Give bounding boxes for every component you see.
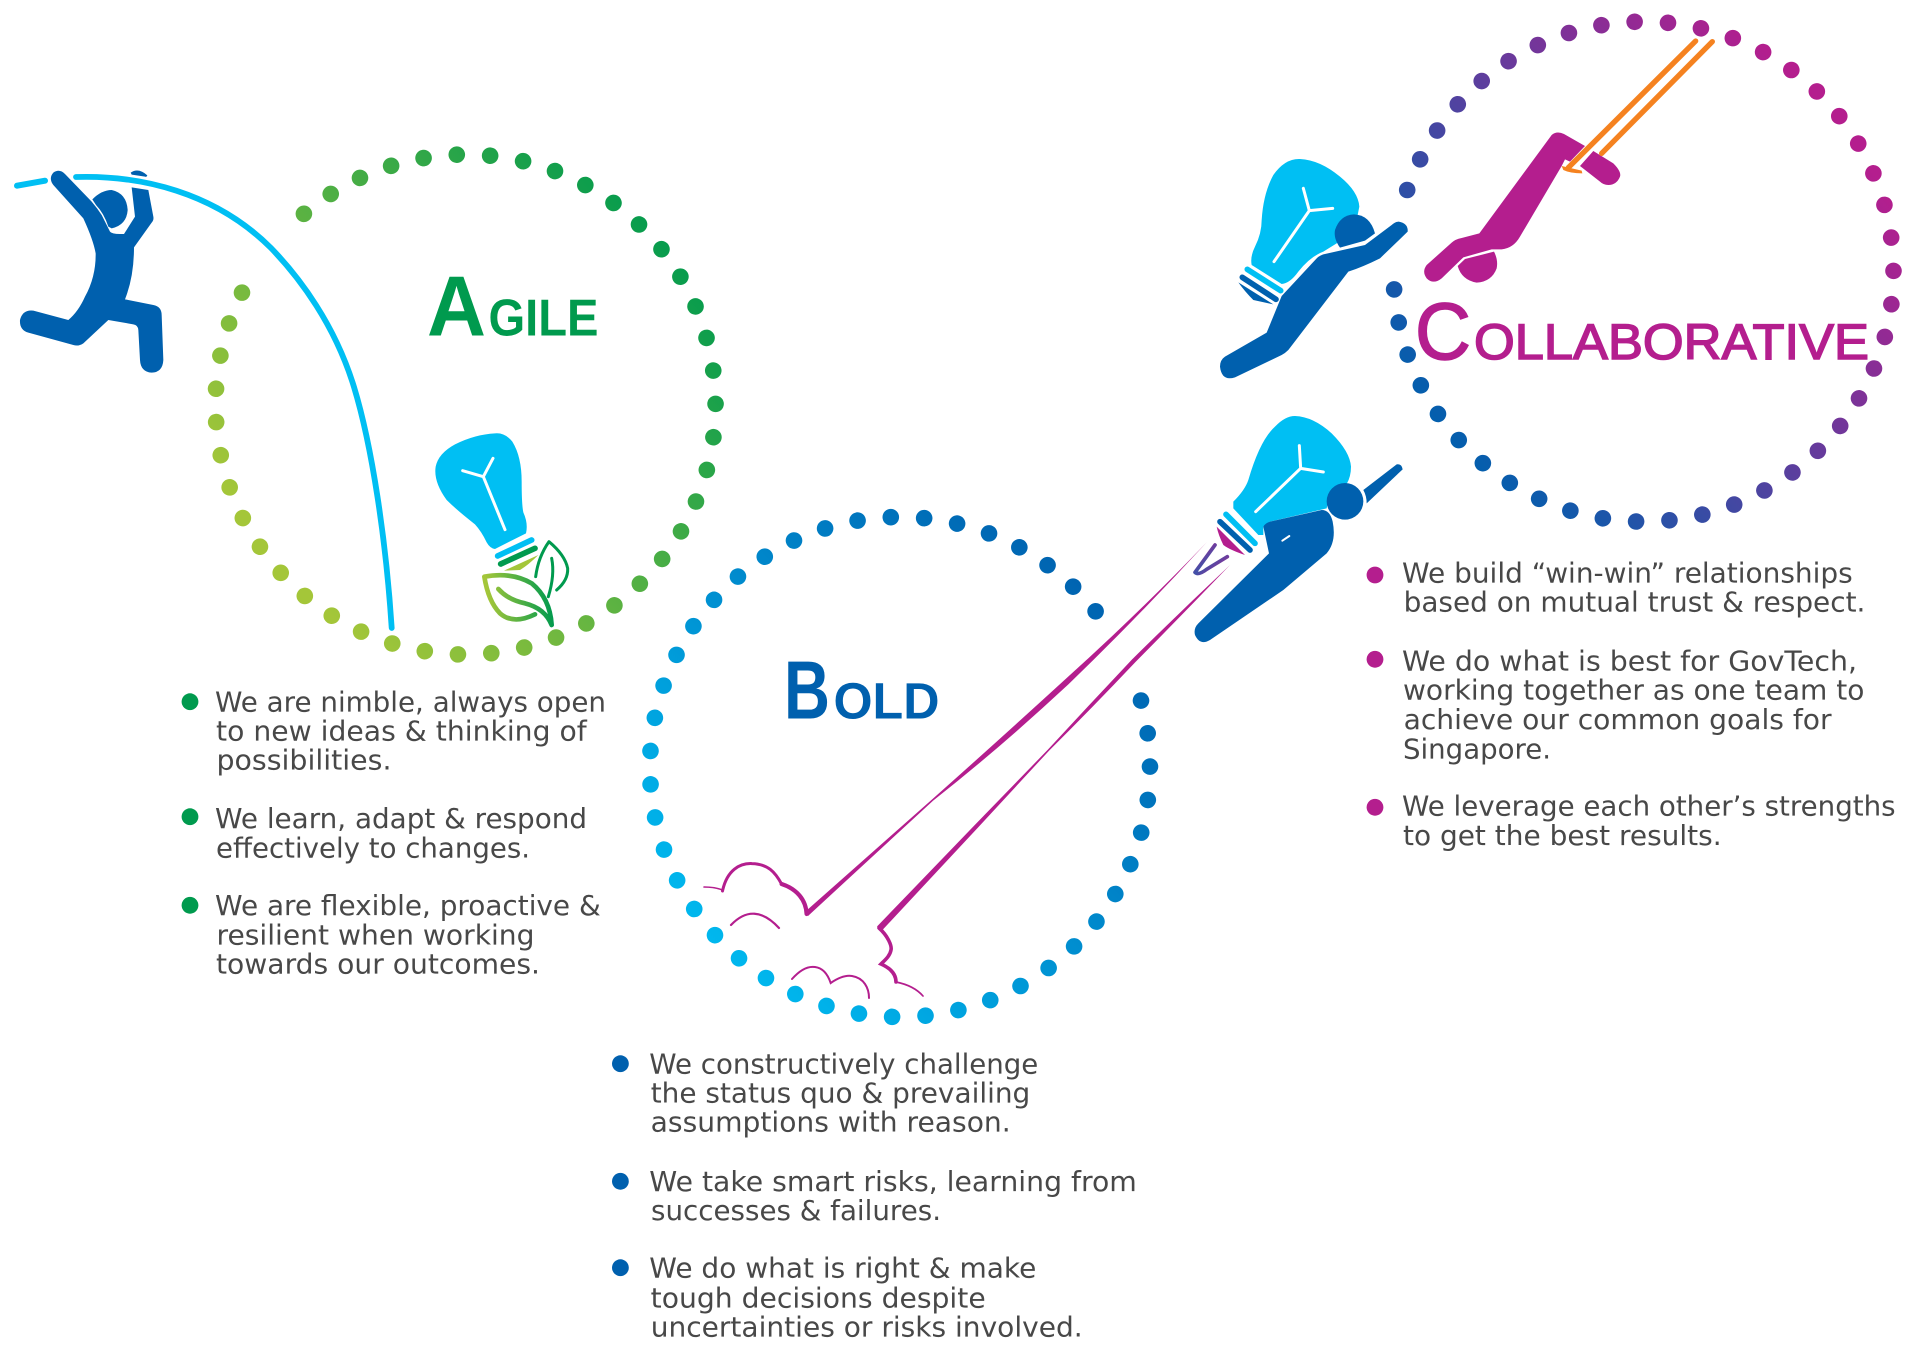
heading: collaborative — [1415, 287, 1869, 377]
bullet: agile 2: effectively to changes. — [216, 832, 530, 864]
bullet: agile 3: resilient when working — [216, 918, 534, 951]
panel: agile — [17, 155, 716, 980]
heading: bold: B — [784, 644, 830, 737]
bullet: bold 1: the status quo & prevailing — [651, 1076, 1030, 1109]
heading: agile: GILE — [488, 289, 598, 347]
bullet: collaborative 3: We leverage each other’s strengths — [1402, 790, 1896, 823]
bullet: agile 2 — [182, 802, 587, 864]
bullet: agile 3: towards our outcomes. — [216, 947, 540, 980]
bullet: agile 2: We learn, adapt & respond — [215, 802, 587, 835]
bullet: collaborative 2 — [1367, 645, 1864, 765]
bullet: bold 3: tough decisions despite — [651, 1281, 986, 1314]
bullet: collaborative 2: working together as one team to — [1403, 674, 1864, 707]
panel: collaborative — [1220, 22, 1896, 852]
bullet: bold 1 — [612, 1047, 1038, 1139]
bullet: collaborative 2: achieve our common goals for — [1404, 703, 1832, 736]
bullet: bold 1: assumptions with reason. — [651, 1106, 1011, 1139]
bullet: agile 1: to new ideas & thinking of — [216, 715, 588, 748]
dotted circle: agile — [216, 155, 716, 655]
bullet: bold 3 — [612, 1251, 1083, 1344]
bullet: bold 2: We take smart risks, learning from — [649, 1165, 1137, 1198]
bullet: collaborative 2: Singapore. — [1403, 732, 1551, 765]
bullet list: agile values — [182, 686, 606, 980]
icon: vaulting pole — [17, 177, 392, 628]
bullet: collaborative 1 — [1367, 556, 1865, 618]
bullet: bold 3: We do what is right & make — [649, 1251, 1036, 1284]
bullet: agile 3 — [182, 889, 601, 980]
icon: magenta figure on orange swing — [1424, 41, 1712, 283]
bullet: bold 1: We constructively challenge — [649, 1047, 1038, 1080]
heading: bold — [784, 644, 940, 737]
bullet: collaborative 1: based on mutual trust & respect. — [1404, 585, 1865, 618]
heading: bold: OLD — [834, 673, 940, 730]
heading: agile — [427, 259, 598, 354]
icon: rocket trail and smoke clouds — [704, 542, 1230, 998]
bullet list: bold values — [612, 1047, 1137, 1344]
bullet: bold 2 — [612, 1165, 1137, 1227]
bullet: agile 1: possibilities. — [216, 744, 392, 776]
bullet: agile 3: We are flexible, proactive & — [215, 889, 601, 922]
icon: pole vaulter figure — [20, 171, 163, 373]
bullet: agile 1 — [182, 686, 606, 776]
bullet: agile 1: We are nimble, always open — [215, 686, 606, 719]
bullet list: collaborative values — [1367, 556, 1896, 852]
bullet: bold 3: uncertainties or risks involved. — [651, 1311, 1083, 1344]
bullet: collaborative 3 — [1367, 790, 1896, 852]
icon: light bulb with leaves — [435, 433, 568, 625]
bullet: collaborative 3: to get the best results. — [1403, 819, 1722, 852]
bullet: collaborative 2: We do what is best for GovTech, — [1402, 645, 1857, 678]
panel: bold — [612, 416, 1403, 1344]
dotted circle: collaborative — [1394, 22, 1894, 522]
bullet: collaborative 1: We build “win-win” relationships — [1402, 556, 1853, 589]
dotted circle: bold — [650, 517, 1150, 1017]
bullet: bold 2: successes & failures. — [651, 1194, 941, 1227]
heading: agile: A — [427, 259, 486, 354]
heading: collaborative: C — [1415, 287, 1471, 377]
icon: rocket figure riding light bulb — [1195, 416, 1403, 642]
icon: blue figure pushing light bulb — [1220, 159, 1408, 378]
heading: collaborative: OLLABORATIVE — [1474, 314, 1869, 370]
